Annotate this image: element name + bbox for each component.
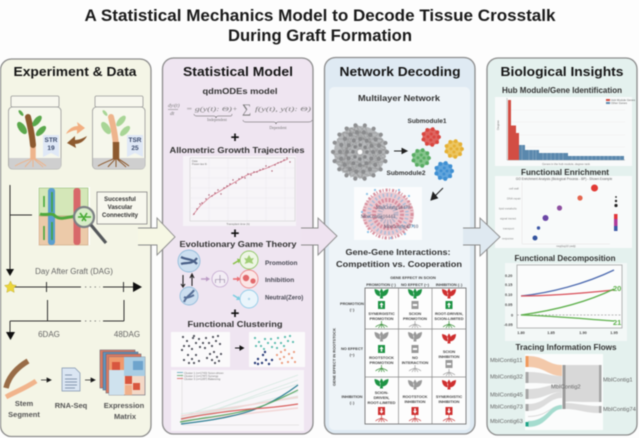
chart: sankey information flows: MbIContig74: [603, 407, 637, 413]
heading: functional decomposition: Functional Decomposition: [514, 253, 616, 263]
matrix: gene interaction outcomes: GENE EFFECT IN SCION: [390, 275, 436, 280]
sampling branches: 6DAG and 48DAG: 48DAG: [114, 330, 140, 339]
heading: statistical model: Statistical Model: [183, 64, 293, 79]
chart: functional decomposition: 1.85: [547, 331, 555, 335]
timeline: day after graft: [4, 267, 142, 292]
arrow: model to network: [301, 218, 337, 255]
chart: cluster trajectories: Cluster 2 (n=1787) Synergy: [184, 374, 219, 378]
matrix: gene interaction outcomes: INHIBITION: [342, 394, 363, 399]
heading: gene-gene interactions: Competition vs. Cooperation: [336, 259, 462, 269]
heading: gene-gene interactions: [336, 247, 462, 269]
icon: STR jar: [8, 96, 61, 169]
heading: evolutionary game theory: Evolutionary Game Theory: [180, 239, 297, 249]
cell: scion-driven root-limited: SCION-: [375, 390, 389, 395]
icon: expression matrix stack: [100, 350, 145, 421]
panel: statistical model: [162, 58, 313, 434]
cell: synergistic inhibition: SYNERGISTIC: [436, 394, 462, 399]
chart: hub gene bars: Other Genes: [611, 101, 628, 105]
chart: cluster trajectories: [171, 370, 304, 431]
arrow: vertical flow to timeline: [6, 185, 32, 276]
arrow: submodule to hub network: [431, 188, 443, 200]
cell: scion inhibition: INHIBITION: [439, 354, 460, 359]
heading: experiment and data: Experiment & Data: [14, 64, 137, 79]
chart: functional decomposition: 20: [613, 284, 621, 293]
chart: allometric growth scatter: Data: [192, 159, 198, 163]
heading: gene-gene interactions: Gene-Gene Interactions:: [346, 247, 450, 257]
title: During Graft Formation: [228, 26, 412, 45]
matrix: gene interaction outcomes: [332, 275, 466, 424]
chart: hub gene hairball: MbiContig16443: [361, 215, 396, 220]
plus: +: [231, 129, 240, 146]
arrow: RNA-seq to matrix: [85, 378, 95, 382]
cluster: red submodule: [422, 128, 440, 146]
sampling branches: 6DAG and 48DAG: [6, 300, 140, 340]
icon: TSR jar: [92, 96, 145, 169]
heading: qdmODEs model: qdmODEs model: [202, 86, 278, 96]
matrix: gene interaction outcomes: NO EFFECT (−): [401, 282, 430, 287]
arrow: to clustered: [235, 346, 244, 350]
cell: rootstock promotion: PROMOTION: [370, 360, 394, 365]
icon: stem segment: Segment: [8, 410, 40, 419]
matrix: gene interaction outcomes: PROMOTION (↑): [366, 282, 397, 287]
panel: biological insights: [487, 58, 637, 435]
chart: functional decomposition: 0.10: [505, 293, 512, 297]
matrix: gene interaction outcomes: NO EFFECT: [341, 346, 364, 351]
chart: sankey information flows: MbIContig11: [490, 358, 522, 364]
matrix: gene interaction outcomes: GENE EFFECT IN ROOTSTOCK: [332, 328, 336, 386]
chart: functional enrichment: transport: [503, 226, 514, 230]
icon: stem segment: [6, 361, 40, 419]
cell: rootstock promotion: [369, 332, 394, 372]
chart: functional enrichment: neg(log10 padj): [556, 244, 576, 248]
chart: cluster trajectories: Cluster 3 (n=1287) Balancing: [184, 377, 221, 381]
cell: synergistic inhibition: INHIBITION: [439, 399, 460, 404]
cell: rootstock inhibition: [403, 380, 428, 422]
icon: game theory diagram: Promotion: [265, 260, 298, 267]
cell: synergistic inhibition: [436, 380, 462, 422]
heading: functional clustering: Functional Clustering: [188, 319, 282, 329]
chart: functional decomposition: -0.05: [504, 323, 513, 327]
timeline: day after graft: Day After Graft (DAG): [35, 267, 113, 276]
cell: scion promotion: [403, 288, 427, 328]
cell: scion promotion: SCION: [409, 311, 421, 316]
arrow: stem to RNA-seq: [41, 378, 51, 382]
chart: sankey information flows: MbIContig2: [551, 384, 581, 390]
callout: vascular connectivity: [97, 192, 147, 224]
arrow: experiment to model: [138, 218, 175, 255]
plus: +: [231, 305, 240, 322]
equation: f(y(t), y(t): Θ): [255, 106, 311, 113]
chart: sankey information flows: [490, 354, 637, 430]
panel: experiment and data: [0, 59, 151, 436]
chart: allometric growth scatter: Power-law fit: [192, 162, 207, 166]
icon: game theory diagram: Neutral(Zero): [265, 294, 303, 302]
equation: +: [233, 105, 237, 113]
chart: functional enrichment: [495, 167, 632, 248]
chart: cluster trajectories: Cluster 1 (n=1743) Scion-driven: [184, 371, 224, 375]
chart: functional enrichment: response: [502, 236, 514, 240]
chart: hub gene bars: [495, 97, 636, 166]
chart: functional enrichment: cell wall: [509, 186, 519, 190]
cell: rootstock promotion: ROOTSTOCK: [369, 355, 394, 360]
icon: RNA-seq document: [55, 368, 88, 410]
arrow: network to submodules: [394, 148, 407, 154]
callout: vascular connectivity: Connectivity: [102, 213, 139, 219]
cell: no interaction: NO: [412, 355, 418, 360]
heading: biological insights: Biological Insights: [500, 64, 624, 79]
equation: ∑: [242, 101, 251, 116]
chart: functional decomposition: 0.05: [505, 303, 512, 307]
chart: functional decomposition: 1.90: [579, 331, 587, 335]
heading: allometric growth trajectories: Allometric Growth Trajectories: [170, 145, 305, 155]
chart: allometric growth scatter: Transplant time (h): [226, 222, 250, 226]
chart: hub gene hairball: MbiContig49710: [384, 225, 419, 230]
chart: functional decomposition: 21: [613, 318, 621, 327]
cell: scion-driven root-limited: DRIVEN,: [374, 395, 389, 400]
icon: expression matrix stack: Matrix: [114, 412, 137, 421]
cell: root-driven scion-limited: SCION-LIMITED: [434, 316, 464, 321]
cell: synergistic promotion: SYNERGISTIC: [368, 311, 395, 316]
cell: root-driven scion-limited: [434, 288, 464, 328]
chart: functional decomposition: 0.15: [505, 283, 512, 287]
cell: synergistic promotion: [368, 288, 395, 328]
icon: game theory diagram: [178, 250, 303, 308]
chart: functional decomposition: [504, 263, 627, 341]
cluster: yellow submodule: [446, 140, 462, 158]
icon: TSR jar: 25: [131, 145, 139, 152]
chart: functional enrichment: lipid metabolic: [499, 206, 517, 210]
equation: = g(y(t): Θ): [186, 106, 232, 113]
arrow: grafting swap: [66, 122, 87, 148]
callout: vascular connectivity: Vascular: [108, 205, 133, 211]
chart: hub gene hairball: MbiContig18478: [376, 206, 411, 211]
chart: hub gene bars: Degree: [496, 120, 500, 130]
title: [84, 6, 556, 45]
chart: functional decomposition: 0.20: [505, 274, 512, 278]
chart: sankey information flows: MbIContig73: [490, 404, 523, 410]
label: submodule2: Submodule2: [386, 170, 426, 177]
chart: functional enrichment: GO Enrichment Analysis (Biological Process - BP) - Shown Example: [516, 177, 612, 181]
heading: multilayer network: Multilayer Network: [358, 93, 440, 103]
chart: sankey information flows: MbIContig45: [490, 392, 523, 398]
chart: sankey information flows: MbIContig32: [490, 374, 523, 380]
matrix: gene interaction outcomes: INHIBITION (↓): [436, 282, 463, 287]
icon: star: [4, 281, 16, 292]
chart: functional decomposition: 1.80: [517, 331, 525, 335]
cell: scion-driven root-limited: [368, 378, 396, 422]
chart: hub gene hairball: [354, 187, 422, 240]
icon: STR jar: 19: [47, 145, 55, 152]
chart: hub gene bars: Hub Module Genes: [611, 98, 636, 102]
arrow: network to insights: [463, 218, 500, 256]
matrix: gene interaction outcomes: (−): [350, 352, 355, 357]
matrix: gene interaction outcomes: (↑): [350, 307, 355, 312]
cell: scion inhibition: SCION: [443, 349, 455, 354]
chart: allometric growth scatter: [183, 156, 296, 226]
cluster: blue submodule: [436, 162, 452, 180]
icon: stem segment: Stem: [15, 399, 33, 408]
icon: magnifier: [74, 207, 106, 243]
graft diagram: [38, 187, 90, 245]
heading: network decoding: Network Decoding: [340, 64, 461, 79]
equation: [168, 101, 312, 130]
chart: clustered scatter: [249, 332, 305, 367]
chart: functional decomposition: 1.95: [610, 331, 618, 335]
cell: rootstock inhibition: ROOTSTOCK: [403, 394, 428, 399]
heading: functional enrichment: Functional Enrichment: [521, 167, 609, 177]
cell: synergistic promotion: PROMOTION: [370, 316, 394, 321]
panel: network decoding: [324, 58, 475, 434]
cell: scion-driven root-limited: ROOT-LIMITED: [368, 400, 396, 405]
equation: dt: [170, 111, 175, 117]
cell: scion inhibition: [439, 334, 460, 376]
cell: no interaction: INTERACTION: [402, 360, 428, 365]
chart: hub gene bars: Genes in the hub module, degree rank: [542, 162, 590, 166]
icon: STR jar: STR: [44, 137, 58, 144]
cell: root-driven scion-limited: ROOT-DRIVEN,: [435, 311, 463, 316]
icon: game theory diagram: Inhibition: [265, 277, 294, 284]
cell: no interaction: [402, 332, 428, 372]
chart: full network: [325, 120, 395, 190]
chart: unclustered scatter: [171, 332, 230, 367]
matrix: gene interaction outcomes: PROMOTION: [340, 301, 364, 306]
chart: functional enrichment: DNA repair: [507, 196, 521, 200]
icon: RNA-seq document: RNA-Seq: [55, 401, 88, 410]
icon: expression matrix stack: Expression: [104, 401, 145, 410]
heading: hub module: Hub Module/Gene Identification: [502, 85, 622, 95]
label: submodule1: Submodule1: [407, 118, 447, 125]
cluster: green submodule: [412, 150, 430, 166]
heading: tracing information flows: Tracing Information Flows: [516, 342, 617, 352]
chart: functional enrichment: signal transd.: [500, 216, 517, 220]
chart: functional decomposition: 0: [511, 314, 513, 318]
title: A Statistical Mechanics Model to Decode Tissue Crosstalk: [84, 6, 556, 25]
matrix: gene interaction outcomes: (↓): [350, 400, 355, 405]
chart: sankey information flows: MbIContig63: [490, 419, 523, 425]
plus: +: [231, 225, 240, 242]
equation: Independent: [207, 117, 228, 122]
chart: sankey information flows: MbIContig1: [603, 378, 633, 384]
cell: scion promotion: PROMOTION: [403, 316, 427, 321]
cell: rootstock inhibition: INHIBITION: [405, 399, 426, 404]
equation: dyi(t): [168, 102, 180, 109]
icon: TSR jar: TSR: [128, 137, 142, 144]
equation: Dependent: [269, 125, 288, 130]
callout: vascular connectivity: Successful: [104, 197, 136, 203]
sampling branches: 6DAG and 48DAG: 6DAG: [38, 330, 60, 339]
